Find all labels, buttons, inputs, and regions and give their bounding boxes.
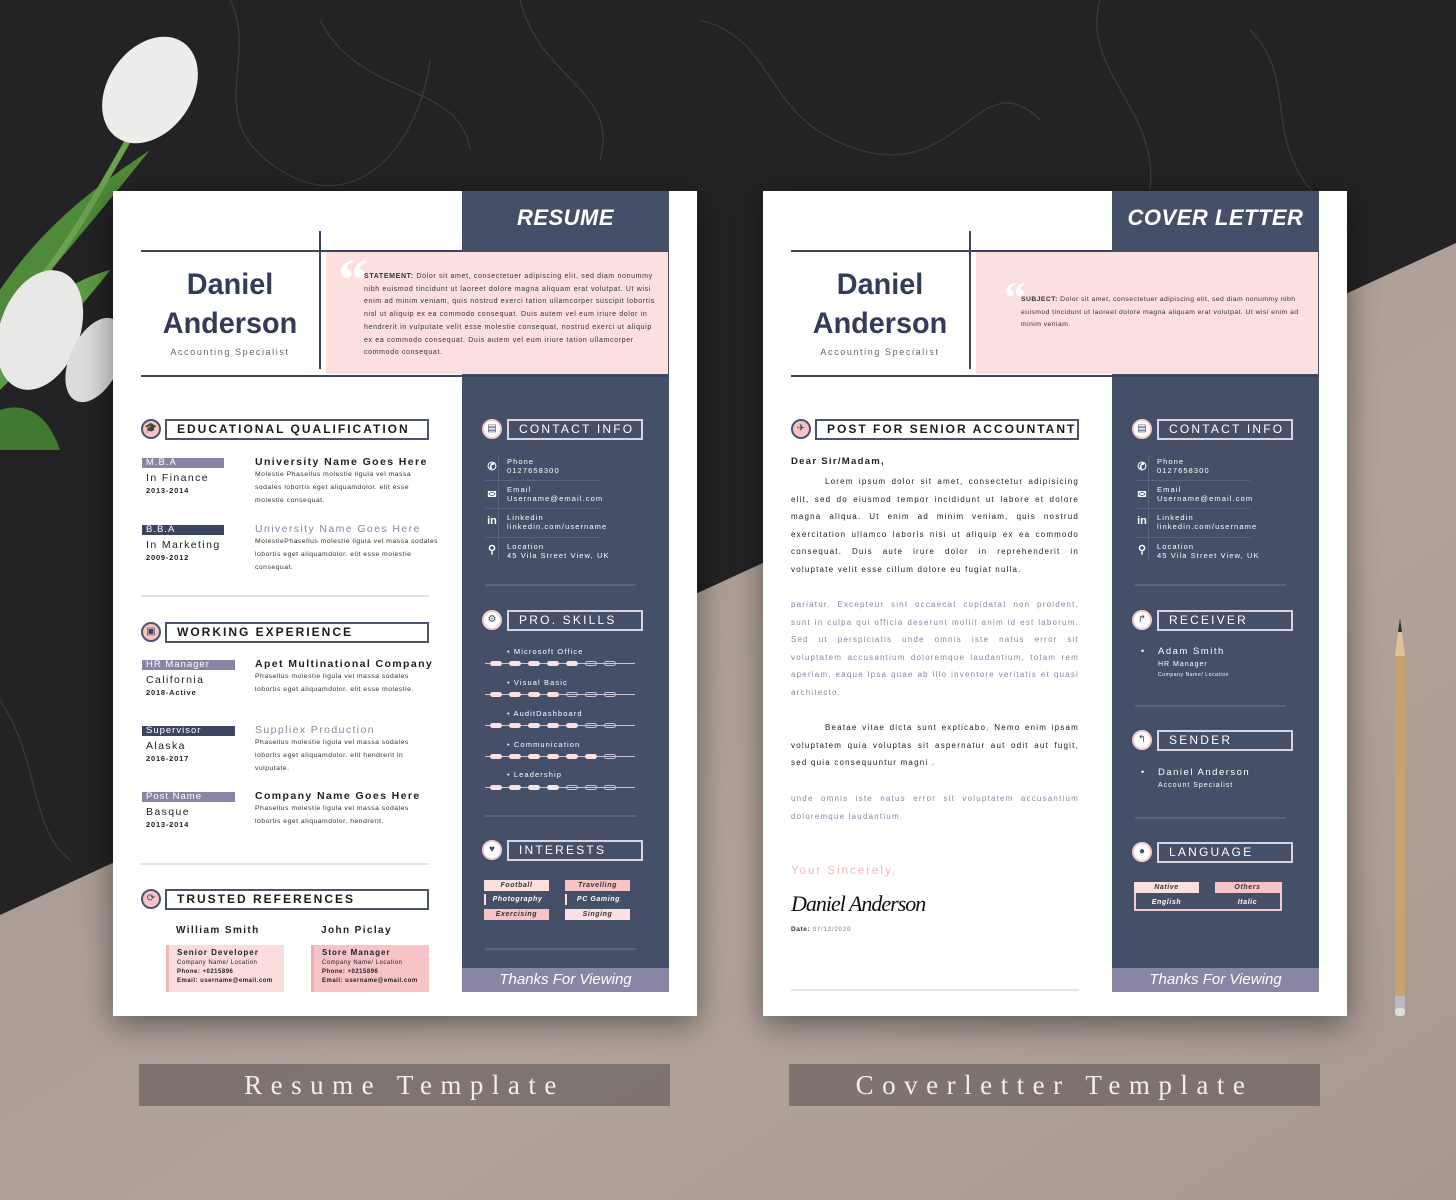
- skill bars: • Visual Basic: [507, 678, 568, 687]
- education item 1: M.B.A: [146, 457, 177, 468]
- subject box: “: [1004, 273, 1026, 322]
- icon: refresh: ⟳: [147, 893, 155, 904]
- icon: gear: [482, 610, 502, 630]
- icon: pin: [791, 419, 811, 439]
- education item 1: 2013-2014: [146, 486, 189, 495]
- name: [813, 268, 947, 340]
- job title: Accounting Specialist: [820, 347, 940, 357]
- skill bars: • AuditDashboard: [507, 709, 583, 718]
- sender details: •: [1141, 767, 1144, 777]
- heading: references: [165, 889, 429, 910]
- contact list: ✆: [1137, 461, 1147, 473]
- reference 2: [311, 925, 429, 992]
- icon: gear: ⚙: [488, 614, 496, 625]
- heading: pro skills: PRO. SKILLS: [519, 613, 617, 627]
- work item 3: Phasellus molestie ligula vel massa sodales lobortis eget aliquamdolor. hendrerit.: [255, 805, 409, 825]
- work item 1: California: [146, 674, 204, 686]
- contact list: Username@email.com: [507, 494, 603, 502]
- heading: receiver: [1157, 610, 1293, 631]
- heading: post: [815, 419, 1079, 440]
- skill bars: [485, 647, 635, 790]
- icon: speech: ●: [1139, 846, 1145, 857]
- receiver details: •: [1141, 646, 1144, 656]
- name: Anderson: [163, 307, 297, 340]
- heading: post: POST FOR SENIOR ACCOUNTANT: [827, 422, 1076, 436]
- education item 1: [142, 456, 428, 504]
- work item 3: 2013-2014: [146, 820, 189, 829]
- education item 1: Molestie Phasellus molestie ligula vel massa sodales lobortis eget aliquamdolor. elit esse molestie consequat.: [255, 471, 411, 504]
- heading: sender: [1157, 730, 1293, 751]
- statement text: STATEMENT: Dolor sit amet, consectetuer adipiscing elit, sed diam nonummy nibh euismod tincidunt ut laoreet dolore magna aliquam erat volutpat. Ut wisi enim ad minim veniam, quis nostrud exerci tation ullamcorper suscipit lobortis nisl ut aliquip ex ea commodo consequat. Duis autem vel eum iriure dolor in hendrerit in vulputate velit esse molestie consequat, nostrud exerci ut aliquip ex ea commodo consequat. Duis autem vel eum iriure tation ullamcorper commodo consequat.: [364, 273, 655, 356]
- work item 2: Supervisor: [146, 725, 201, 736]
- contact list: Location: [507, 542, 544, 551]
- icon: forward arrow: ↱: [1138, 614, 1146, 625]
- date: Date: 07/12/2020: [791, 926, 851, 933]
- contact list: ⚲: [488, 544, 496, 556]
- education item 2: In Marketing: [146, 539, 221, 551]
- contact list: 45 Vila Street View, UK: [1157, 550, 1260, 560]
- interest pills: Football: [500, 882, 533, 889]
- work item 2: Alaska: [146, 740, 186, 752]
- heading: education: EDUCATIONAL QUALIFICATION: [177, 422, 410, 436]
- contact list: linkedin.com/username: [507, 522, 607, 530]
- decoration: pencil: [1395, 618, 1405, 1016]
- icon: forward arrow: [1132, 610, 1152, 630]
- icon: contact chat: [1132, 419, 1152, 439]
- interest pills: Travelling: [578, 882, 617, 889]
- education item 2: MolestiePhasellus molestie ligula vel massa sodales lobortis eget aliquamdolor. elit esse molestie consequat.: [255, 538, 438, 571]
- interest pills: Exercising: [496, 911, 537, 918]
- icon: heart: [482, 840, 502, 860]
- language pills: Italic: [1238, 899, 1257, 906]
- work item 3: Post Name: [146, 791, 202, 802]
- work item 1: Phasellus molestie ligula vel massa sodales lobortis eget aliquamdolor. elit esse molestie.: [255, 673, 414, 693]
- name: Anderson: [813, 307, 947, 340]
- heading: language: [1157, 842, 1293, 863]
- contact list: linkedin.com/username: [1157, 522, 1257, 530]
- heading: receiver: RECEIVER: [1169, 613, 1248, 627]
- name: [163, 268, 297, 340]
- icon: briefcase: ▣: [146, 626, 156, 637]
- work item 1: [142, 658, 433, 697]
- sender details: Daniel Anderson: [1158, 767, 1250, 778]
- icon: contact chat: ▤: [1137, 423, 1147, 434]
- letter body: pariatur. Excepteur sint occaecat cupidatat non proident, sunt in culpa qui officia deserunt mollit anim id est laborum. Sed ut perspiciatis unde omnis iste natus error sit voluptatem accusantium doloremque laudantium, totam rem aperiam, eaque ipsa quae ab illo inventore veritatis et quasi architecto.: [791, 600, 1079, 697]
- icon: pin: ✈: [797, 423, 805, 434]
- contact list: 45 Vila Street View, UK: [507, 550, 610, 560]
- heading: education: [165, 419, 429, 440]
- work item 2: Phasellus molestie ligula vel massa sodales lobortis eget aliquamdolor. elit hendrerit in vulputate.: [255, 739, 409, 772]
- icon: contact chat: [482, 419, 502, 439]
- language pills: [1134, 882, 1282, 911]
- receiver details: Company Name/ Location: [1158, 672, 1229, 678]
- letter body: Dear Sir/Madam,: [791, 456, 885, 467]
- statement box: “: [338, 247, 368, 313]
- education item 2: B.B.A: [146, 524, 175, 535]
- reference 2: John Piclay: [321, 925, 392, 936]
- education item 1: University Name Goes Here: [255, 456, 428, 468]
- panel: cover letter page: [763, 191, 1347, 1016]
- decoration: tulips: [0, 36, 198, 450]
- reference 1: Company Name/ Location: [177, 960, 257, 966]
- education item 2: [142, 523, 438, 571]
- receiver details: HR Manager: [1158, 661, 1208, 668]
- skill bars: • Microsoft Office: [507, 647, 583, 656]
- language pills: Native: [1154, 884, 1179, 891]
- icon: back arrow: ↰: [1138, 734, 1146, 745]
- contact list: in: [487, 515, 497, 527]
- title: RESUME: RESUME: [517, 205, 614, 230]
- heading: interests: INTERESTS: [519, 843, 606, 857]
- reference 1: William Smith: [176, 925, 260, 936]
- subject text: SUBJECT: Dolor sit amet, consectetuer adipiscing elit, sed diam nonummy nibh euismod tincidunt ut laoreet dolore magna aliquam erat volutpat. Ut wisi enim ad minim veniam.: [1021, 296, 1298, 328]
- icon: speech: [1132, 842, 1152, 862]
- letter body: [791, 456, 1079, 821]
- contact list: Phone: [1157, 457, 1184, 466]
- interest pills: Singing: [583, 911, 612, 918]
- reference 1: Email: username@email.com: [177, 978, 273, 984]
- education item 2: 2009-2012: [146, 553, 189, 562]
- contact list: ✆: [487, 461, 497, 473]
- interest pills: Photography: [493, 896, 542, 903]
- thanks band: [462, 968, 669, 992]
- name: Daniel: [187, 268, 273, 301]
- contact list: ⚲: [1138, 544, 1146, 556]
- icon: graduation cap: 🎓: [145, 423, 157, 434]
- education item 1: In Finance: [146, 472, 209, 484]
- closing: Your Sincerely,: [791, 865, 897, 877]
- statement box: [326, 252, 668, 374]
- letter body: Beatae vitae dicta sunt explicabo. Nemo enim ipsam voluptatem quia voluptas sit aspernatur aut odit aut fugit, sed quia consequuntur magni .: [791, 723, 1079, 767]
- heading: contact info: [1157, 419, 1293, 440]
- heading: contact info: CONTACT INFO: [519, 422, 634, 436]
- contact list: in: [1137, 515, 1147, 527]
- heading: references: TRUSTED REFERENCES: [177, 892, 355, 906]
- heading: contact info: [507, 419, 643, 440]
- work item 2: Suppliex Production: [255, 724, 375, 736]
- interest pills: [484, 880, 630, 920]
- contact list: 0127658300: [507, 466, 560, 474]
- contact list: ✉: [487, 489, 497, 501]
- reference 2: Email: username@email.com: [322, 978, 418, 984]
- panel: resume page: [113, 191, 697, 1016]
- title: COVER LETTER: COVER LETTER: [1128, 205, 1303, 230]
- contact list: Username@email.com: [1157, 494, 1253, 502]
- contact list: Linkedin: [507, 513, 544, 522]
- label: resume template: [139, 1064, 670, 1106]
- language pills: Others: [1234, 884, 1261, 891]
- heading: interests: [507, 840, 643, 861]
- reference 1: [166, 925, 284, 992]
- label: resume template: Resume Template: [244, 1070, 565, 1100]
- contact list: [485, 456, 610, 561]
- contact list: [1135, 456, 1260, 561]
- sidebar: cover letter: [1112, 191, 1319, 992]
- work item 1: 2018-Active: [146, 688, 196, 697]
- skill bars: • Leadership: [507, 770, 562, 779]
- thanks band: [1112, 968, 1319, 992]
- heading: language: LANGUAGE: [1169, 845, 1253, 859]
- reference 1: Phone: +0215896: [177, 969, 233, 975]
- contact list: Email: [507, 485, 531, 494]
- heading: contact info: CONTACT INFO: [1169, 422, 1284, 436]
- contact list: Email: [1157, 485, 1181, 494]
- icon: refresh: [141, 889, 161, 909]
- heading: pro skills: [507, 610, 643, 631]
- work item 2: [142, 724, 409, 772]
- sidebar: resume: [462, 191, 669, 992]
- work item 3: [142, 790, 421, 829]
- reference 2: Company Name/ Location: [322, 960, 402, 966]
- label: coverletter template: Coverletter Template: [856, 1070, 1253, 1100]
- job title: Accounting Specialist: [170, 347, 290, 357]
- language pills: English: [1152, 899, 1181, 906]
- contact list: Location: [1157, 542, 1194, 551]
- reference 1: Senior Developer: [177, 948, 259, 957]
- contact list: Phone: [507, 457, 534, 466]
- icon: briefcase: [141, 622, 161, 642]
- sender details: [1141, 767, 1250, 789]
- icon: heart: ♥: [489, 844, 495, 855]
- skill bars: • Communication: [507, 740, 580, 749]
- reference 2: Phone: +0215896: [322, 969, 378, 975]
- work item 3: Basque: [146, 806, 190, 818]
- icon: graduation cap: [141, 419, 161, 439]
- heading: working experience: WORKING EXPERIENCE: [177, 625, 353, 639]
- icon: back arrow: [1132, 730, 1152, 750]
- work item 1: Apet Multinational Company: [255, 658, 433, 670]
- work item 1: HR Manager: [146, 659, 210, 670]
- heading: working experience: [165, 622, 429, 643]
- thanks band: Thanks For Viewing: [1149, 971, 1282, 988]
- subject box: [976, 252, 1318, 374]
- letter body: unde omnis iste natus error sit voluptatem accusantium doloremque laudantium.: [791, 794, 1079, 821]
- receiver details: Adam Smith: [1158, 646, 1225, 657]
- contact list: 0127658300: [1157, 466, 1210, 474]
- sender details: Account Specialist: [1158, 782, 1233, 789]
- icon: contact chat: ▤: [487, 423, 497, 434]
- receiver details: [1141, 646, 1229, 678]
- letter body: Lorem ipsum dolor sit amet, consectetur adipisicing elit, sed do eiusmod tempor incididunt ut labore et dolore magna aliqua. Ut enim ad minim veniam, quis nostrud exercitation ullamco laboris nisi ut aliquip ex ea commodo consequat. Duis aute irure dolor in reprehenderit in voluptate velit esse cillum dolore eu fugiat nulla.: [791, 477, 1079, 574]
- reference 2: Store Manager: [322, 948, 391, 957]
- education item 2: University Name Goes Here: [255, 523, 421, 535]
- heading: sender: SENDER: [1169, 733, 1232, 747]
- work item 3: Company Name Goes Here: [255, 790, 421, 802]
- signature: Daniel Anderson: [791, 891, 925, 916]
- work item 2: 2016-2017: [146, 754, 189, 763]
- interest pills: PC Gaming: [577, 896, 620, 903]
- thanks band: Thanks For Viewing: [499, 971, 632, 988]
- contact list: ✉: [1137, 489, 1147, 501]
- contact list: Linkedin: [1157, 513, 1194, 522]
- name: Daniel: [837, 268, 923, 301]
- label: coverletter template: [789, 1064, 1320, 1106]
